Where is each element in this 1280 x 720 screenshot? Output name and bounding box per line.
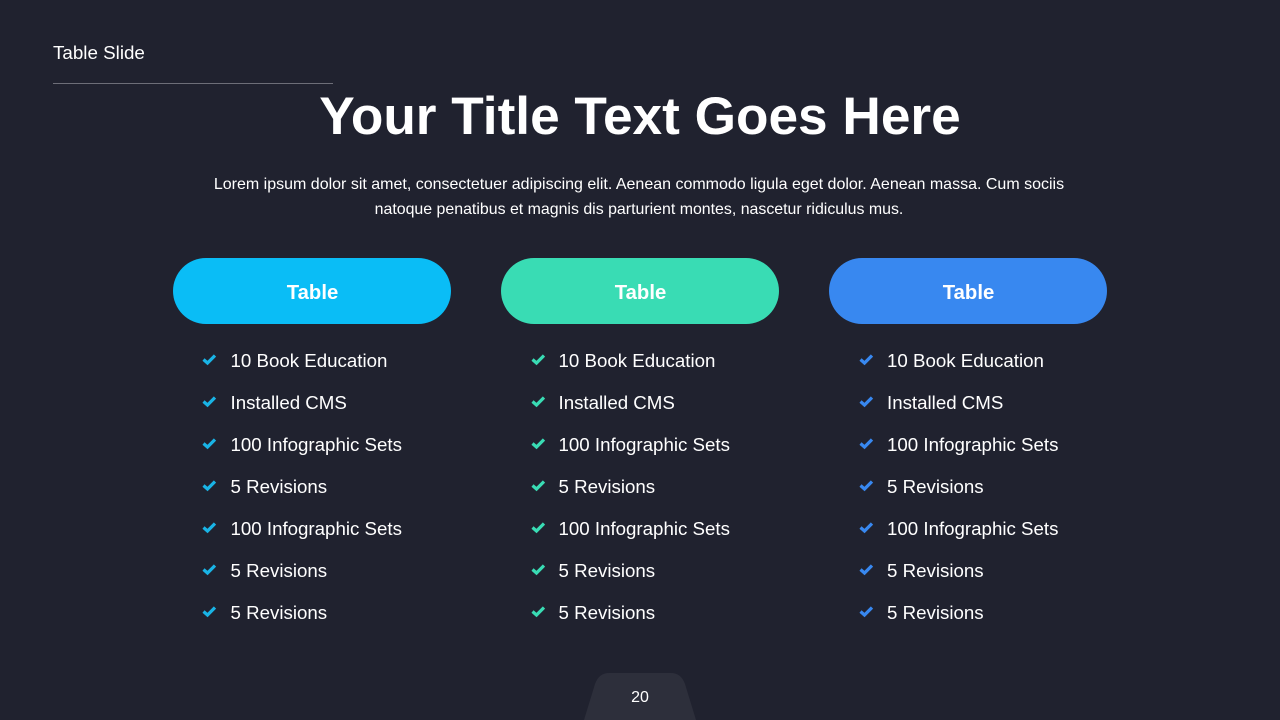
column 1 list: 100 Infographic Sets (230, 434, 402, 455)
column 3 list (860, 350, 1058, 623)
column 2 list: 5 Revisions (558, 560, 655, 581)
column 2 list: 100 Infographic Sets (558, 434, 730, 455)
column 1 list: 100 Infographic Sets (230, 518, 402, 539)
column 2 header pill: Table (615, 282, 666, 304)
column 2 list (532, 350, 730, 623)
column 3 list: 100 Infographic Sets (887, 518, 1058, 539)
column 2 list: Installed CMS (558, 392, 675, 413)
column 2 list: 10 Book Education (558, 350, 715, 371)
column 1 list: 5 Revisions (230, 476, 327, 497)
title: Your Title Text Goes Here (319, 87, 961, 146)
column 3 header pill (829, 258, 1107, 324)
intro text (214, 176, 1064, 218)
section label: Table Slide (53, 42, 145, 63)
column 3 list: 100 Infographic Sets (887, 434, 1058, 455)
column 2 list: 100 Infographic Sets (558, 518, 730, 539)
column 3 list: 5 Revisions (887, 476, 984, 497)
column 3 list: 5 Revisions (887, 560, 984, 581)
column 1 list: 10 Book Education (230, 350, 387, 371)
column 1 list: 5 Revisions (230, 560, 327, 581)
column 3 header pill: Table (943, 282, 994, 304)
column 2 list: 5 Revisions (558, 476, 655, 497)
column 3 list: 5 Revisions (887, 602, 984, 623)
column 2 list: 5 Revisions (558, 602, 655, 623)
column 2 header pill (501, 258, 779, 324)
page number tab: 20 (631, 689, 649, 706)
column 1 list: Installed CMS (230, 392, 347, 413)
intro text: Lorem ipsum dolor sit amet, consectetuer adipiscing elit. Aenean commodo ligula eget dolor. Aenean massa. Cum sociis (214, 176, 1064, 193)
column 1 list (202, 350, 402, 623)
column 1 list: 5 Revisions (230, 602, 327, 623)
page number tab (584, 673, 696, 720)
column 1 header pill: Table (287, 282, 338, 304)
column 3 list: Installed CMS (887, 392, 1003, 413)
column 3 list: 10 Book Education (887, 350, 1044, 371)
column 1 header pill (173, 258, 451, 324)
intro text: natoque penatibus et magnis dis parturient montes, nascetur ridiculus mus. (375, 201, 903, 218)
